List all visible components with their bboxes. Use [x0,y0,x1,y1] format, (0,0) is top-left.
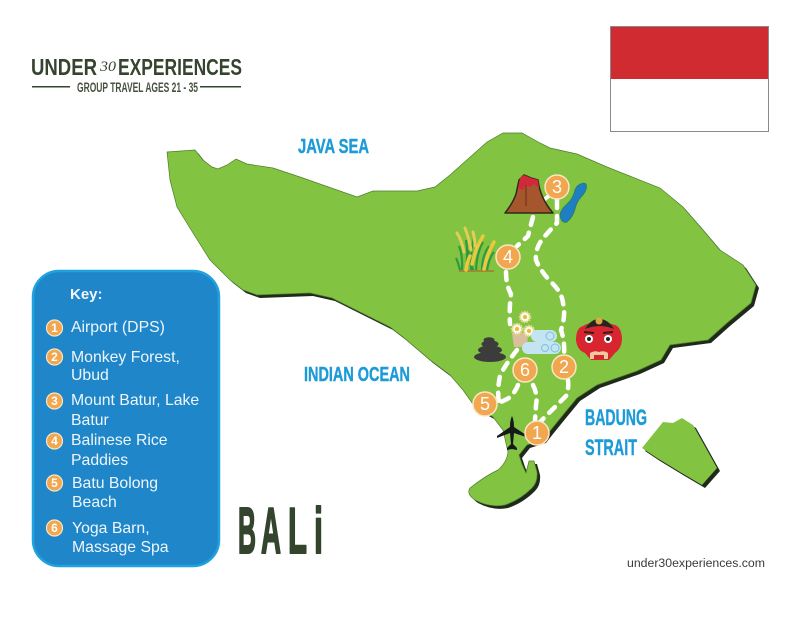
Nusa Penida island [642,418,717,485]
key item 4: Balinese Rice [71,432,168,449]
marker 4 [496,245,520,269]
key item 3: Mount Batur, Lake [71,392,199,409]
label: Badung Strait: BADUNG [585,405,647,430]
key item 3 [46,392,199,429]
island shadow [170,136,759,509]
logo: Under 30 Experiences: EXPERIENCES [118,54,242,80]
label: Indian Ocean: INDIAN OCEAN [304,364,410,386]
key item 2 [46,349,180,384]
key item 5: Batu Bolong [72,475,158,492]
key item 2: 2 [51,350,58,364]
marker 3: 3 [552,177,562,197]
icon: volcano [505,175,553,213]
map of Bali [167,133,759,509]
key item 6: Yoga Barn, [72,520,150,537]
key item 2: Monkey Forest, [71,349,180,366]
icon: stacked stones [474,337,506,362]
icon: rolled towels [522,330,561,354]
flag of Indonesia [610,26,768,132]
marker 6 [513,358,537,382]
key item 5: 5 [51,476,58,490]
marker 3 [545,175,569,199]
route dashes [497,195,568,421]
logo: Under 30 Experiences: GROUP TRAVEL AGES 21 - 35 [77,80,198,95]
icon: airplane [497,416,526,450]
main island [167,133,756,506]
panel: key [33,271,219,566]
key item 1: 1 [51,321,58,335]
marker 4: 4 [503,247,513,267]
title: Bali [238,494,323,567]
title: Bali: B [238,494,256,567]
marker 5 [473,392,497,416]
key item 3: Batur [71,412,109,429]
icon: lake [560,183,586,222]
key item 6 [46,520,169,556]
logo: Under 30 Experiences: UNDER [31,54,97,80]
title: Bali: L [288,494,307,567]
key item 4 [46,432,168,469]
route markers [473,175,576,445]
icon: Balinese mask [576,318,622,360]
marker 1 [525,421,549,445]
key item 5: Beach [72,494,117,511]
text: i [314,494,323,567]
marker 1: 1 [532,423,542,443]
key item 2: Ubud [71,367,109,384]
marker 6: 6 [520,360,530,380]
website url: under30experiences.com [627,556,765,570]
marker 2 [552,355,576,379]
label: Badung Strait [585,405,647,460]
key heading: Key: [70,286,103,303]
key item 1: Airport (DPS) [71,319,165,336]
marker 2: 2 [559,357,569,377]
label: Badung Strait: STRAIT [585,435,637,460]
label: Java Sea: JAVA SEA [298,136,369,158]
title: Bali: A [261,494,281,567]
logo: Under 30 Experiences: 30 [99,59,117,75]
key item 3: 3 [51,394,58,408]
key item 6: Massage Spa [72,539,169,556]
key item 4: 4 [51,434,58,448]
key item 6: 6 [51,521,58,535]
icon: flowers in a pot [512,312,534,347]
logo: Under 30 Experiences [31,54,242,95]
key item 4: Paddies [71,452,128,469]
icon: rice plants [456,228,494,271]
marker 5: 5 [480,394,490,414]
key item 5 [46,475,158,511]
